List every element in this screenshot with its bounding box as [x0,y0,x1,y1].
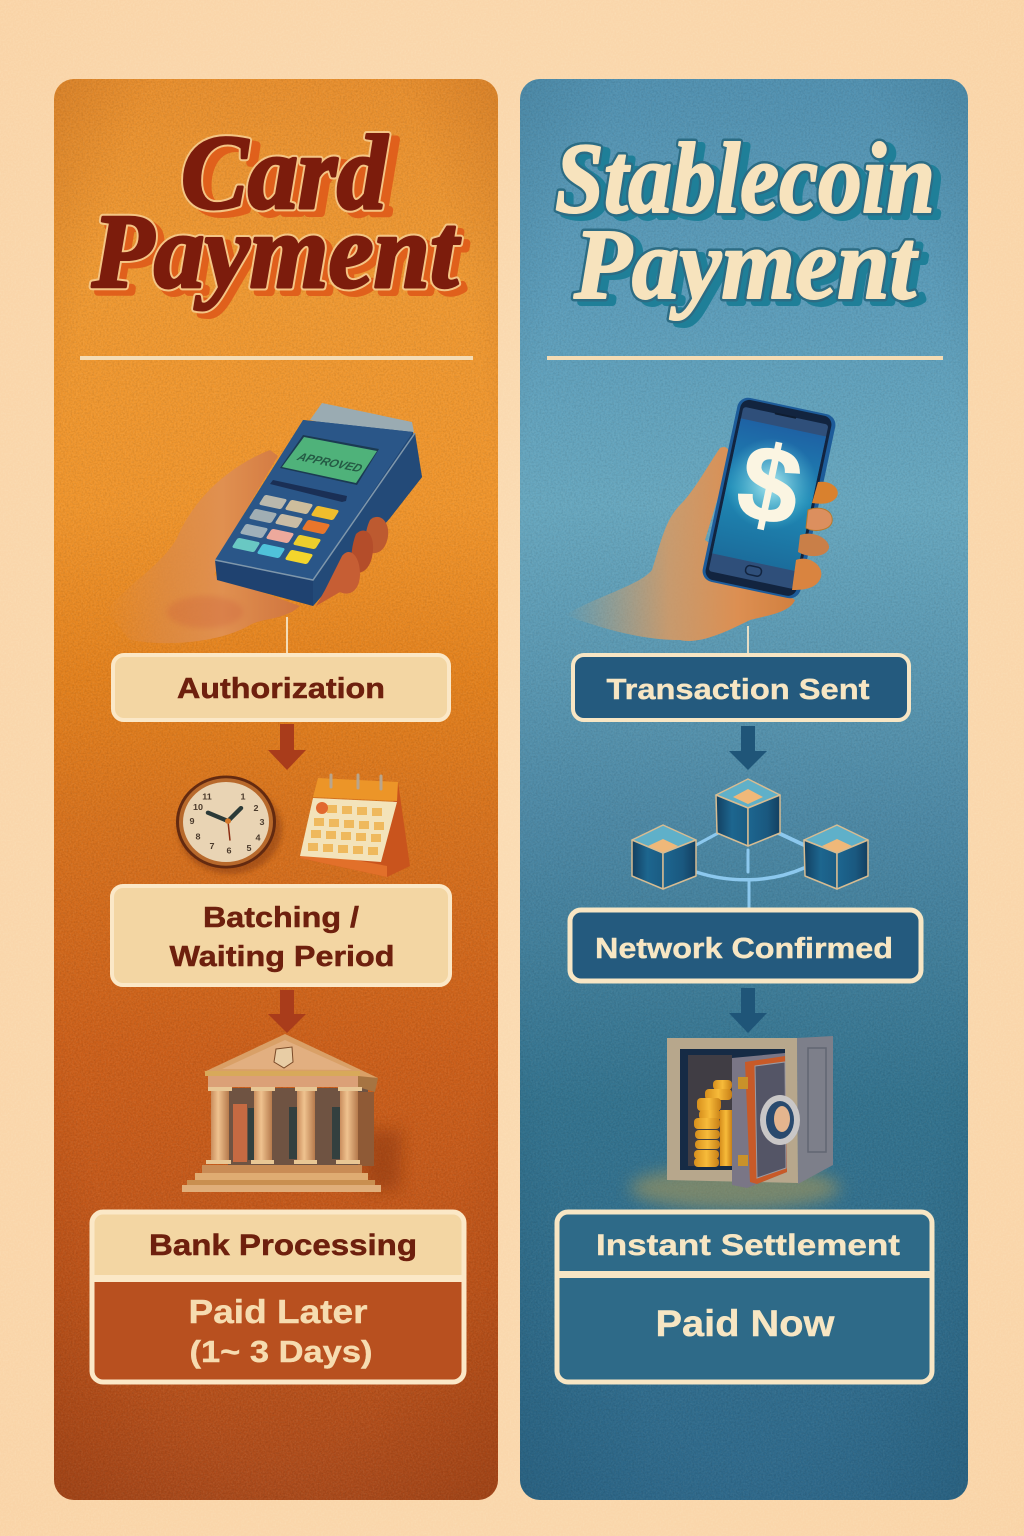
title: stablecoin payment: Stablecoin [555,122,935,234]
icon: clock: 10 [193,802,203,812]
title: card payment: Card [181,114,389,231]
title: stablecoin payment: Payment [573,208,919,320]
arrow [268,724,306,770]
icon: safe with coins [630,1036,840,1210]
title: card payment: Payment [91,193,461,310]
divider [80,356,473,360]
icon: clock: 8 [195,832,201,842]
title: card payment [91,114,467,315]
result card: bank processing: Bank Processing [149,1229,417,1262]
title: card payment: Payment [91,193,461,310]
result card: bank processing [92,1212,464,1382]
screen text: APPROVED [294,451,365,475]
title: card payment: Payment [97,198,467,315]
icon: clock: 3 [259,817,265,827]
panel: card payment [54,79,498,1500]
connector line [286,617,288,653]
label: transaction sent [573,655,909,720]
cube [716,779,780,846]
panel background [520,79,968,1500]
icon: clock: 6 [226,846,232,856]
label: batching / waiting period: Batching / [203,902,359,934]
title: stablecoin payment: Payment [580,212,926,324]
title: card payment: Card [189,119,397,236]
label: batching / waiting period [112,886,450,985]
arrow [729,726,767,770]
icon: hand holding card terminal [105,403,422,643]
label: network confirmed [570,910,921,981]
result card: instant settlement [557,1212,932,1382]
icon: clock: 9 [189,816,195,826]
label: authorization [113,655,449,720]
icon: hand holding phone [565,396,838,641]
arrow [729,988,767,1033]
connector line [747,626,749,654]
arrow [268,990,306,1033]
dollar sign: $ [728,419,812,550]
icon: bank [182,1034,402,1192]
icon: clock: 2 [253,803,259,813]
result card: bank processing: Paid Later [188,1293,368,1330]
divider [547,356,943,360]
blockchain network diagram [632,779,868,908]
icon: clock: 5 [246,843,252,853]
result card: bank processing: (1~ 3 Days) [190,1334,372,1369]
result card: instant settlement: Paid Now [656,1303,835,1344]
title: stablecoin payment: Stablecoin [555,122,935,234]
connectors [696,830,804,908]
title: stablecoin payment: Payment [573,208,919,320]
gold coins [694,1080,732,1167]
label: network confirmed: Network Confirmed [595,933,893,965]
icon: clock: 1 [240,792,246,802]
result card: instant settlement: Instant Settlement [596,1229,900,1262]
label: authorization: Authorization [177,673,385,705]
title: stablecoin payment [555,122,942,324]
title: card payment: Card [181,114,389,231]
icon: clock: 7 [209,841,215,851]
panel background [54,79,498,1500]
cube [804,825,868,889]
label: transaction sent: Transaction Sent [606,674,870,706]
icon: clock: 11 [202,792,212,802]
panel: stablecoin payment [520,79,968,1500]
label: batching / waiting period: Waiting Period [170,941,394,973]
icon: clock [176,775,282,874]
cube [632,825,696,889]
icon: clock: 4 [255,833,261,843]
icon: calendar [300,775,410,877]
title: stablecoin payment: Stablecoin [562,126,942,238]
